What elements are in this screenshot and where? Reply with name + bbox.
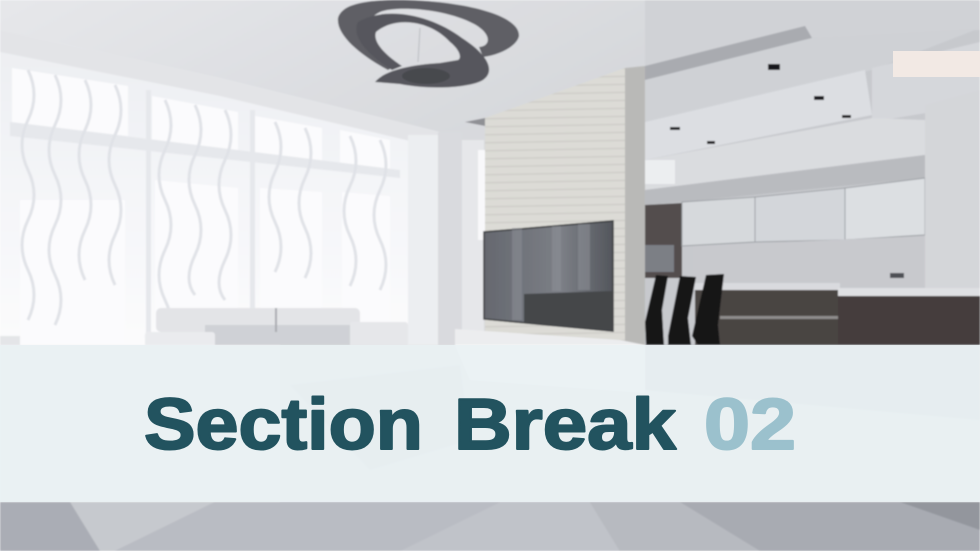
bar chairs (645, 274, 724, 345)
heading: Section Break 02 (144, 385, 796, 465)
ceiling (0, 0, 980, 150)
white sofa back (0, 308, 408, 347)
heading word: Section: Section (144, 385, 423, 465)
translucent banner (0, 345, 980, 502)
ceiling spotlights (670, 64, 851, 144)
heading number: 02: 02 (704, 385, 796, 465)
window glare (12, 68, 390, 345)
tall cabinet and oven (645, 203, 682, 278)
tv console (455, 329, 645, 345)
upper cabinets (682, 178, 925, 246)
base cabinets (695, 290, 838, 345)
corner accent bar (893, 51, 980, 77)
back wall (436, 130, 486, 350)
television (484, 221, 613, 331)
ceiling lamp (338, 0, 519, 87)
tiled column (465, 66, 645, 345)
kitchen ceiling panels (645, 0, 980, 78)
heading word: Break: Break (454, 385, 677, 465)
foreground sofa and floor (0, 502, 980, 551)
floor area behind banner (0, 345, 980, 502)
window frame bars (10, 90, 400, 345)
countertop (690, 283, 840, 290)
kitchen (645, 0, 980, 345)
backsplash (693, 236, 925, 287)
right wall (925, 90, 980, 300)
window curtains (0, 30, 485, 345)
